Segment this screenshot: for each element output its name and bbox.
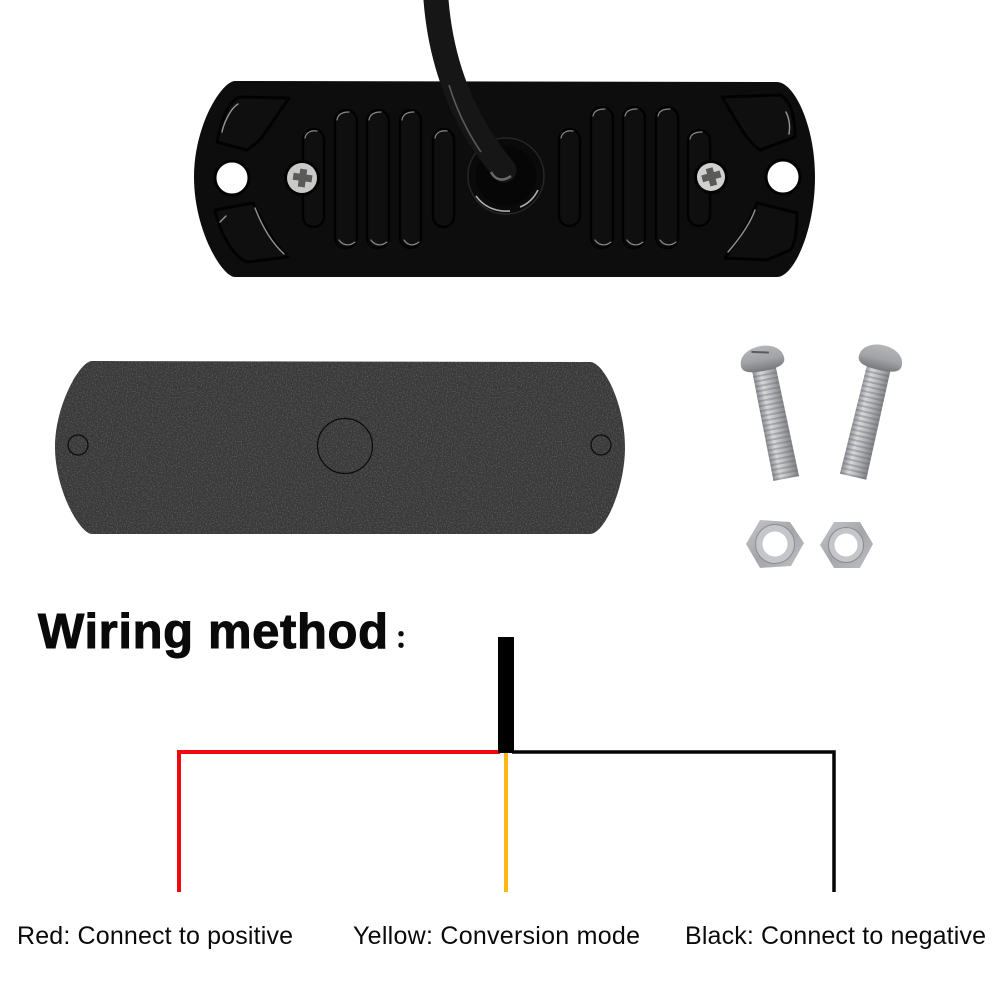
- red wire: [179, 752, 500, 892]
- caption: yellow: Yellow: Conversion mode: [353, 922, 640, 950]
- wiring diagram: [179, 637, 834, 892]
- mounting holes: [215, 160, 800, 195]
- icon: nut left: [746, 520, 804, 568]
- title: Wiring method: [38, 605, 388, 659]
- cable grommet: [468, 138, 544, 214]
- mounting screw left: [284, 160, 320, 196]
- grille slots: [303, 107, 710, 248]
- pocket highlights: [220, 104, 790, 254]
- mounting screw right: [694, 160, 728, 194]
- corner pockets: [215, 95, 797, 262]
- panel: foam gasket: [55, 361, 625, 534]
- cable: [436, 0, 511, 179]
- slot highlights: [305, 109, 702, 245]
- main cable bar: [498, 637, 514, 753]
- caption: black: Black: Connect to negative: [685, 922, 986, 950]
- panel: light back plate: [194, 0, 815, 277]
- plate body: [194, 81, 815, 277]
- icon: bolt right: [832, 340, 905, 482]
- caption: red: Red: Connect to positive: [17, 922, 293, 950]
- title colon: ：: [395, 626, 419, 653]
- yellow wire: [504, 752, 508, 892]
- black wire: [512, 752, 834, 892]
- icon: bolt left: [738, 342, 807, 483]
- icon: nut right: [820, 522, 873, 568]
